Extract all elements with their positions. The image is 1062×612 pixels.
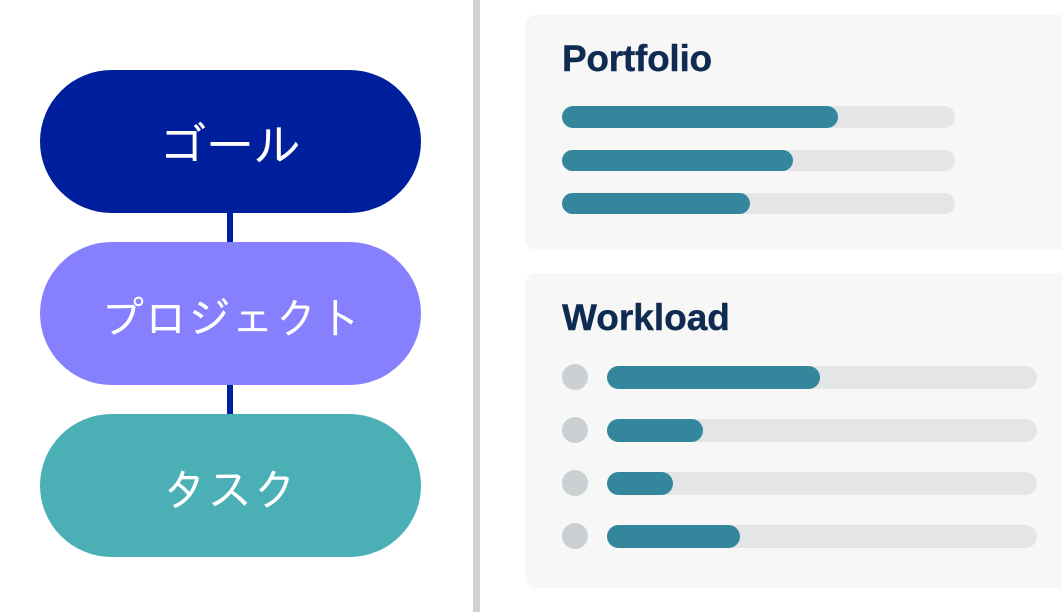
- row: workload 3: [562, 470, 1037, 496]
- heading: workload: Workload: [562, 297, 730, 338]
- pill: task: タスク: [162, 467, 298, 512]
- heading: portfolio: Portfolio: [562, 38, 712, 79]
- row: workload 4: [562, 523, 1037, 549]
- pill: project: プロジェクト: [100, 296, 362, 340]
- row: workload 2: [562, 417, 1037, 443]
- bar: portfolio 1: [562, 106, 955, 128]
- panel: workload: [525, 273, 1062, 588]
- hierarchy diagram: [40, 70, 421, 557]
- panel: portfolio: [525, 15, 1062, 250]
- bar: portfolio 2: [562, 150, 955, 171]
- pill: goal: ゴール: [159, 120, 301, 168]
- connector: project to task: [227, 382, 233, 417]
- pill: project: [40, 242, 421, 385]
- connector: goal to project: [227, 210, 233, 245]
- pill: task: [40, 414, 421, 557]
- row: workload 1: [562, 364, 1037, 390]
- bar: portfolio 3: [562, 193, 955, 214]
- pill: goal: [40, 70, 421, 213]
